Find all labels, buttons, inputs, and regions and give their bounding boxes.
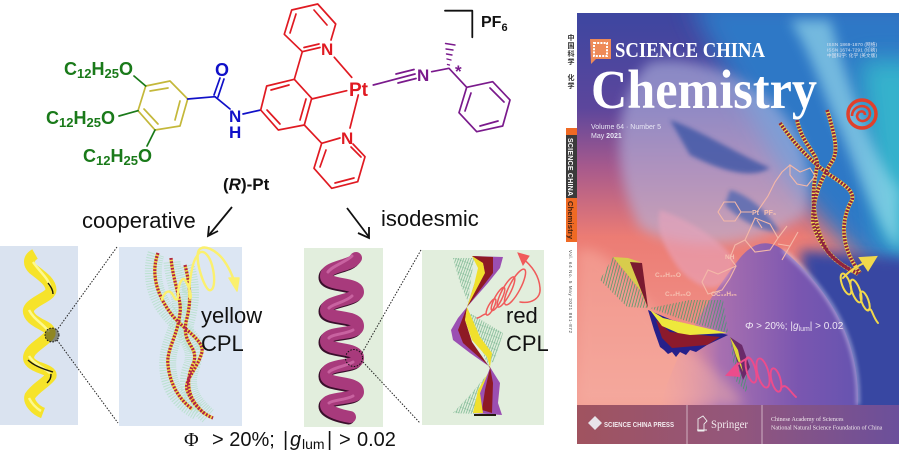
pyridine N bottom: N bbox=[341, 129, 353, 148]
purple ribbon bbox=[451, 256, 503, 415]
Springer horse icon bbox=[697, 416, 707, 431]
label: yellow CPL: yellow bbox=[201, 303, 262, 328]
journal cover bbox=[577, 0, 899, 444]
panel: cooperative assembly magnified bbox=[119, 247, 262, 426]
dark base bbox=[474, 414, 496, 416]
formula: quantum yield and dissymmetry: g bbox=[290, 429, 301, 451]
cover pink spiral bbox=[727, 356, 796, 397]
ISSN block: ISSN 1674-7291 (印刷) bbox=[827, 46, 877, 54]
dodecyl label bottom: 25 bbox=[123, 153, 138, 168]
chemical structure: (R)-Pt complex bbox=[119, 4, 510, 188]
pale bubble bbox=[619, 60, 809, 244]
dodecyl label middle: 25 bbox=[86, 115, 101, 130]
formula: quantum yield and dissymmetry: > bbox=[339, 429, 351, 451]
dodecyl label top: C bbox=[64, 59, 77, 79]
issue info bbox=[591, 124, 661, 140]
ribbon dark spiked underside bbox=[648, 310, 728, 357]
formula: quantum yield and dissymmetry: | bbox=[327, 429, 332, 451]
isocyanide N: N bbox=[417, 66, 429, 85]
coil highlights bbox=[328, 256, 353, 403]
counterion bracket bbox=[445, 11, 472, 37]
academies: National Natural Science Foundation of China bbox=[771, 424, 883, 432]
cover molecule labels: C₁₂H₂₅O bbox=[665, 291, 691, 298]
yellow CPL spiral bbox=[162, 248, 239, 299]
cover molecule labels: NH bbox=[725, 254, 735, 261]
formula: quantum yield and dissymmetry bbox=[184, 429, 396, 452]
pyridine N top: N bbox=[321, 40, 333, 59]
amide linker bbox=[188, 78, 261, 114]
purple sphere bbox=[660, 243, 858, 405]
light-blue streak bbox=[790, 20, 899, 250]
cover molecule labels: Pt bbox=[752, 210, 760, 217]
coil shadow bbox=[324, 260, 356, 418]
spine Chinese title: 国 bbox=[568, 42, 574, 50]
ribbon bbox=[28, 254, 53, 413]
PF6: PF bbox=[481, 14, 501, 31]
formula: quantum yield and dissymmetry: | bbox=[283, 429, 288, 451]
press name: SCIENCE CHINA PRESS bbox=[604, 420, 674, 429]
label: yellow CPL: CPL bbox=[201, 331, 244, 356]
issue info: May 2021 bbox=[591, 133, 622, 140]
ribbon upper lobe bbox=[613, 257, 648, 308]
spine Chinese title: 学 bbox=[568, 57, 574, 66]
red round emblem bbox=[848, 100, 876, 128]
spine volume: Vol. 64 No. 5 May 2021 861-872 bbox=[568, 250, 573, 333]
PF6: 6 bbox=[501, 22, 508, 34]
cover helix strands bbox=[780, 110, 860, 274]
arrow: cooperative bbox=[208, 207, 232, 236]
panel: purple coil helix bbox=[304, 248, 383, 427]
issue info: Volume 64 · Number 5 bbox=[591, 124, 661, 131]
hatching: side chains bbox=[153, 254, 208, 416]
platinum: Pt bbox=[349, 80, 369, 101]
cover molecule labels bbox=[655, 210, 776, 298]
ribbon hatching bbox=[600, 257, 747, 393]
spine Chinese title: 化 bbox=[568, 73, 574, 82]
formula: quantum yield and dissymmetry: lum bbox=[302, 436, 325, 452]
pink folds bbox=[577, 249, 745, 405]
spine SCIENCE CHINA: SCIENCE CHINA bbox=[566, 138, 573, 196]
press diamond bbox=[588, 416, 602, 430]
arrow: isodesmic bbox=[347, 208, 369, 238]
spine Chinese title: 科 bbox=[568, 49, 574, 58]
label: red CPL: CPL bbox=[506, 331, 549, 356]
ISSN block bbox=[827, 41, 877, 59]
dodecyl label middle: H bbox=[73, 108, 86, 128]
label: red CPL: red bbox=[506, 303, 538, 328]
chiral star: * bbox=[455, 62, 462, 81]
cover molecule labels: OC₁₂H₂₅ bbox=[711, 291, 737, 298]
magnifier circle bbox=[346, 350, 362, 366]
academies: Chinese Academy of Sciences bbox=[771, 416, 844, 423]
panel: yellow ribbon helix bbox=[0, 246, 78, 425]
cover molecule labels: C₁₂H₂₅O bbox=[655, 272, 681, 279]
cover logo bbox=[590, 39, 611, 64]
Springer: Springer bbox=[711, 419, 748, 431]
dodecyl label bottom: O bbox=[138, 146, 152, 166]
compound name: (R)-Pt bbox=[223, 175, 270, 194]
ISSN block: 中国科学: 化学 (英文版) bbox=[827, 52, 877, 59]
formula: quantum yield and dissymmetry: 0.02 bbox=[357, 429, 396, 451]
hatching: side chains bbox=[453, 258, 503, 414]
isocyanide ligand bbox=[373, 44, 510, 132]
dodecyl label middle: C bbox=[46, 108, 59, 128]
spine Chinese title: 中 bbox=[568, 33, 574, 42]
zoom lines: red bbox=[362, 250, 421, 423]
dodecyl label bottom: H bbox=[110, 146, 123, 166]
ribbon lower lobe bbox=[730, 337, 750, 380]
label: cooperative: cooperative bbox=[82, 208, 196, 233]
spine of journal bbox=[566, 33, 577, 333]
cover title: SCIENCE CHINA: SCIENCE CHINA bbox=[615, 38, 766, 62]
central phenyl ring bbox=[261, 4, 365, 188]
dodecyl label bottom: C bbox=[83, 146, 96, 166]
cover molecule labels: PF₆ bbox=[764, 210, 776, 217]
red CPL spiral bbox=[477, 253, 540, 318]
dodecyl label top: O bbox=[119, 59, 133, 79]
dark blue smears bbox=[670, 120, 770, 173]
publisher band bbox=[577, 405, 899, 444]
cover metric: Φ > 20%; |g bbox=[745, 321, 799, 332]
cover background bbox=[577, 13, 899, 444]
gallate aryl ring bbox=[138, 81, 188, 130]
molecule labels bbox=[46, 14, 508, 194]
spine Chinese title: 学 bbox=[568, 81, 574, 90]
dodecyl label middle: 12 bbox=[59, 115, 73, 130]
dodecyl label top: H bbox=[91, 59, 104, 79]
dodecyl label bottom: 12 bbox=[96, 153, 110, 168]
dodecyl label middle: O bbox=[101, 108, 115, 128]
label: isodesmic: isodesmic bbox=[381, 206, 479, 231]
ribbon red band bbox=[656, 320, 720, 348]
cover metric: lum bbox=[799, 326, 810, 333]
deep blue lower right bbox=[800, 250, 899, 420]
dodecyloxy bonds bbox=[119, 76, 155, 146]
spine Chemistry: Chemistry bbox=[566, 201, 575, 240]
ISSN block: ISSN 1869-1870 (网络) bbox=[827, 41, 877, 48]
amide NH: H bbox=[229, 123, 241, 142]
cover molecule bbox=[702, 165, 815, 294]
red ribbon bbox=[458, 256, 493, 413]
dodecyl label top: 12 bbox=[77, 66, 91, 81]
formula: quantum yield and dissymmetry: > 20%; bbox=[212, 429, 275, 451]
zoom lines: yellow bbox=[57, 247, 118, 423]
panel: isodesmic assembly magnified bbox=[422, 250, 549, 425]
formula: quantum yield and dissymmetry: Φ bbox=[184, 429, 199, 451]
carbonyl oxygen: O bbox=[215, 60, 229, 80]
ribbon yellow band bbox=[650, 310, 727, 335]
magnifier circle bbox=[45, 328, 59, 342]
cover metric: | > 0.02 bbox=[810, 321, 844, 332]
blue upper right wash bbox=[686, 13, 899, 268]
dodecyl label top: 25 bbox=[104, 66, 119, 81]
coil body bbox=[326, 258, 358, 417]
cover title: Chemistry: Chemistry bbox=[591, 59, 817, 120]
amide NH: N bbox=[229, 107, 241, 126]
strands bbox=[155, 253, 213, 418]
yellow ribbon bbox=[465, 256, 492, 413]
teal right wash bbox=[860, 60, 899, 270]
cover yellow spiral bbox=[838, 257, 878, 323]
cover ribbon bbox=[600, 257, 750, 393]
